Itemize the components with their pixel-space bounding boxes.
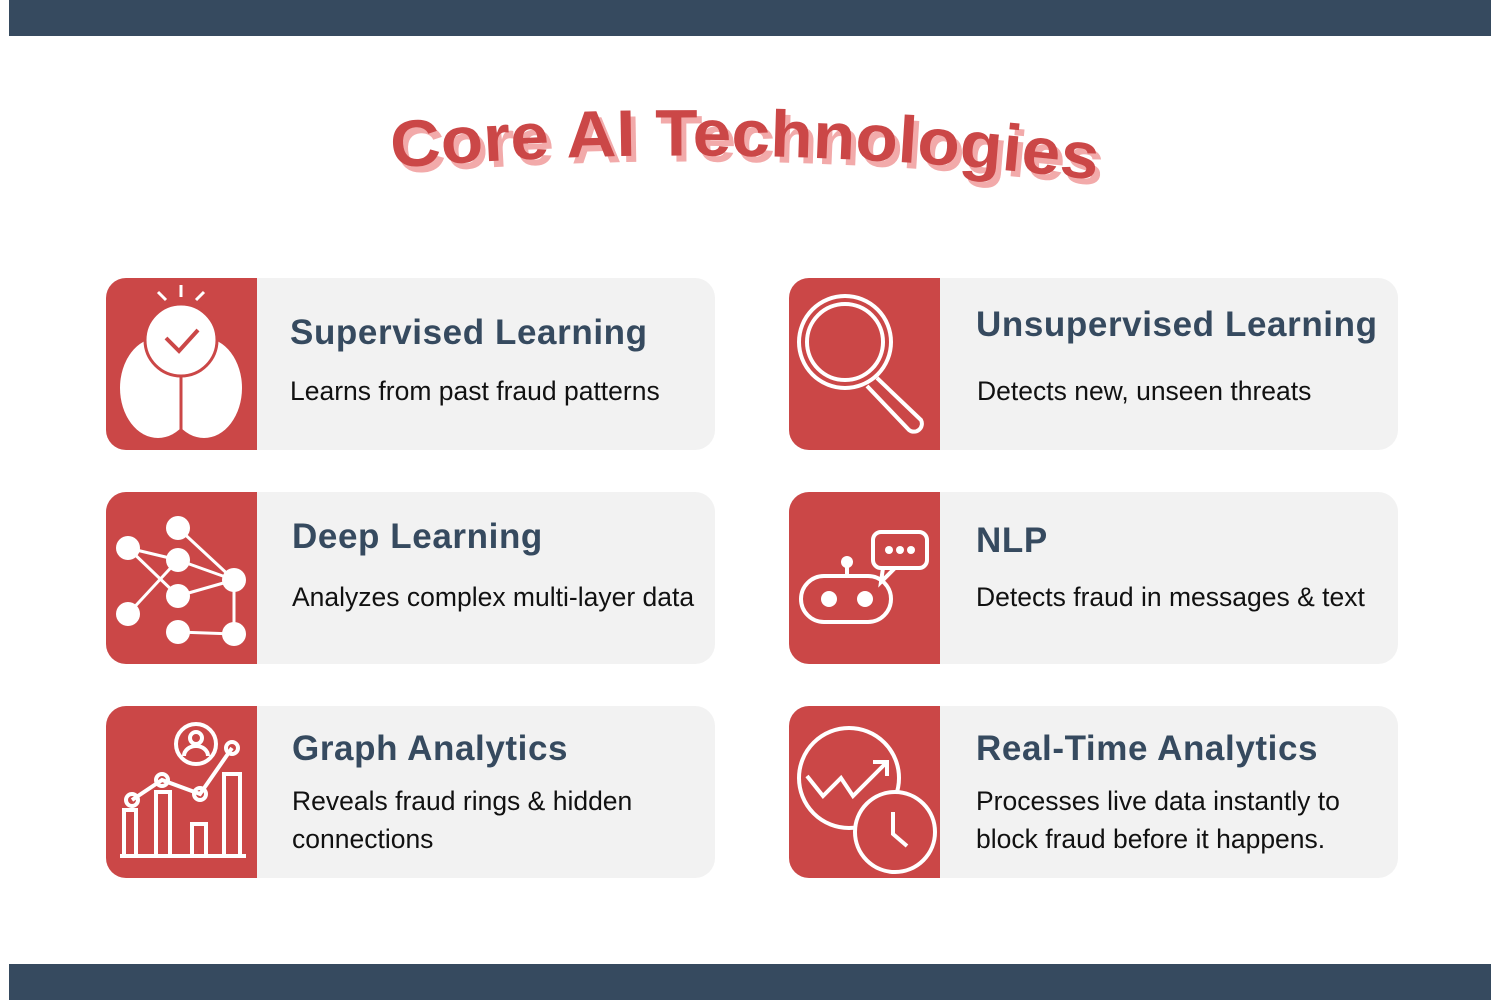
card: NLP: NLP	[976, 521, 1048, 560]
card: real-time analytics: Processes live data instantly to	[976, 786, 1340, 816]
card: graph analytics: Reveals fraud rings & hidden	[292, 786, 632, 816]
card: graph analytics: connections	[292, 824, 433, 854]
card: supervised learning: Supervised Learning	[290, 313, 648, 352]
title: Core AI Technologies	[392, 108, 1096, 182]
icon: network	[106, 492, 257, 664]
card: unsupervised learning: Unsupervised Learning	[976, 305, 1378, 344]
card: graph analytics	[106, 706, 715, 878]
card: real-time analytics	[789, 706, 1398, 878]
card: deep learning: Deep Learning	[292, 517, 543, 556]
icon: magnifier	[789, 278, 940, 450]
card: supervised learning	[106, 278, 715, 450]
card: real-time analytics: Real-Time Analytics	[976, 729, 1318, 768]
card: NLP	[789, 492, 1398, 664]
card: graph analytics: Graph Analytics	[292, 729, 568, 768]
card: supervised learning: Learns from past fraud patterns	[290, 376, 660, 406]
card: real-time analytics: block fraud before it happens.	[976, 824, 1325, 854]
card: unsupervised learning	[789, 278, 1398, 450]
icon: brain	[106, 278, 257, 450]
card: unsupervised learning: Detects new, unseen threats	[977, 376, 1311, 406]
icon: chart	[106, 706, 257, 878]
card: deep learning: Analyzes complex multi-layer data	[292, 582, 694, 612]
card: deep learning	[106, 492, 715, 664]
title: Core AI Technologies	[401, 114, 1101, 188]
icon: clock chart	[789, 706, 940, 878]
icon: chatbot	[789, 492, 940, 664]
card: NLP: Detects fraud in messages & text	[976, 582, 1365, 612]
